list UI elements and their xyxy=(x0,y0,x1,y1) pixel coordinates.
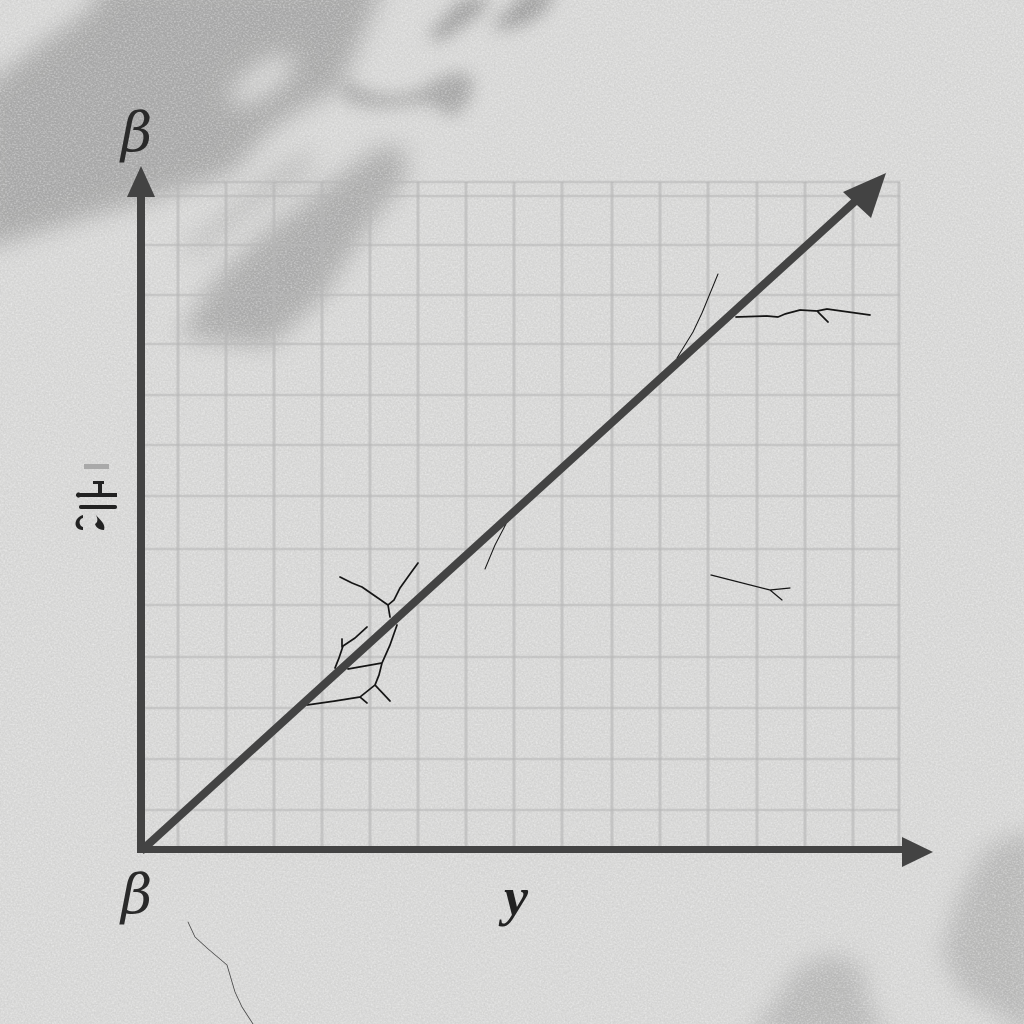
chart grid xyxy=(145,182,900,847)
y axis top label: β xyxy=(119,101,152,164)
origin label: β xyxy=(119,863,152,926)
crack: centre xyxy=(485,522,507,569)
rotated garbled y axis label xyxy=(76,464,117,530)
shadow: main leaf mass xyxy=(0,0,386,250)
crack: lower branch xyxy=(307,625,397,705)
crack: bottom wall xyxy=(188,922,253,1024)
shadow: branch xyxy=(341,73,474,115)
crack: upper left of line xyxy=(340,563,418,617)
shadow: bottom leaf xyxy=(745,953,890,1024)
leaf shadows: bottom right xyxy=(745,830,1024,1024)
crack: right xyxy=(711,575,790,600)
shadow: lower leaf xyxy=(179,147,407,347)
x axis label: y xyxy=(498,867,529,927)
x axis with arrow xyxy=(137,837,933,867)
diagonal trend line with arrow xyxy=(141,173,886,851)
leaf shadows: top left xyxy=(0,0,556,347)
shadow: top leaflets xyxy=(428,0,556,42)
crack: left branch xyxy=(335,627,367,668)
shadow: right leaf xyxy=(941,830,1024,1024)
shadow: faint connecting band xyxy=(179,147,314,255)
crack: upper right horizontal xyxy=(736,309,870,322)
crack: upper right thin xyxy=(677,274,718,358)
cracks xyxy=(188,274,870,1024)
y axis with arrow xyxy=(127,166,155,853)
